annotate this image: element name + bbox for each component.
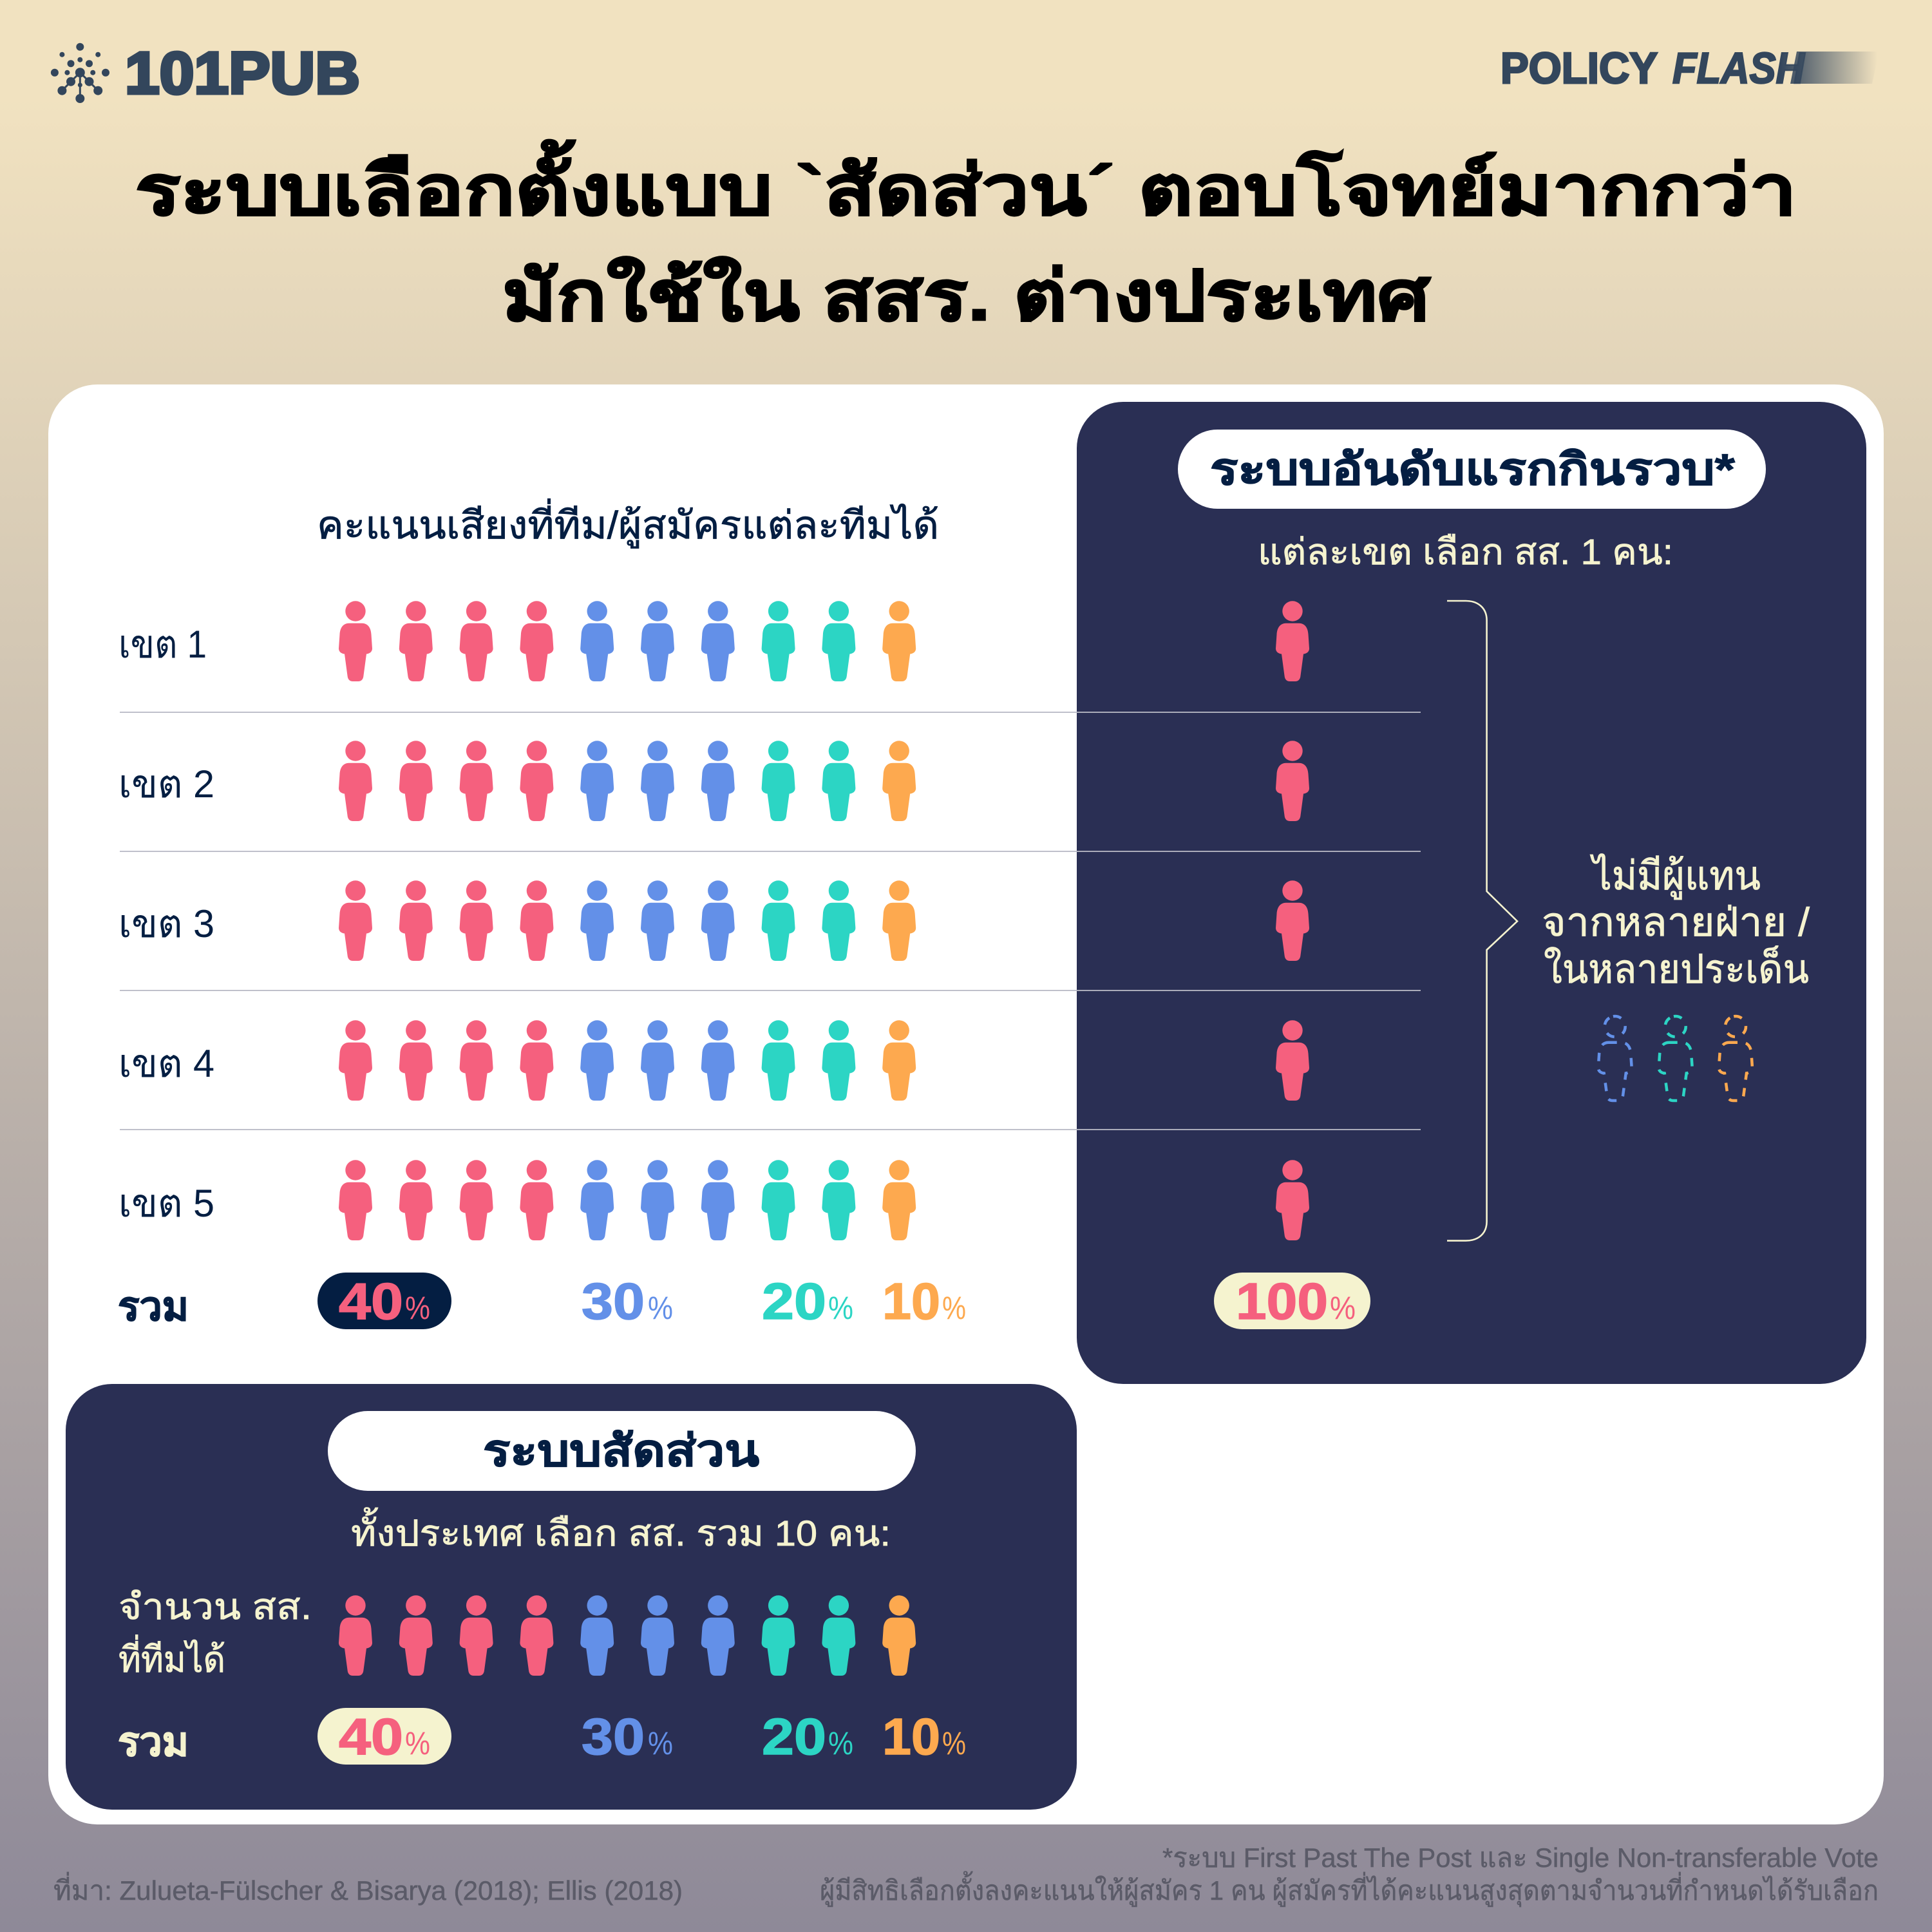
footnote: ผู้มีสิทธิเลือกตั้งลงคะแนนให้ผู้สมัคร 1 คน ผู้สมัครที่ได้คะแนนสูงสุดตามจำนวนที่กำหนดได้รับเลือก bbox=[820, 1871, 1879, 1908]
label: POLICY FLASH bbox=[1501, 44, 1879, 93]
wordmark: 101PUB bbox=[125, 41, 360, 106]
footnote bbox=[820, 1842, 1879, 1908]
row: district 2 bbox=[118, 741, 916, 821]
pill heading: proportional system bbox=[328, 1411, 916, 1491]
value: 20%: % bbox=[828, 1290, 853, 1326]
dashed unrepresented icons bbox=[1598, 1014, 1752, 1101]
value: 20% bbox=[762, 1708, 853, 1765]
value: 30%: 30 bbox=[582, 1273, 645, 1330]
label: total: รวม bbox=[118, 1285, 189, 1329]
value: 10% bbox=[882, 1273, 966, 1330]
label: POLICY FLASH: POLICY bbox=[1501, 44, 1658, 93]
callout: no representation: ไม่มีผู้แทน bbox=[1589, 853, 1761, 900]
bracket bbox=[1447, 601, 1517, 1241]
value: 10% bbox=[882, 1708, 966, 1765]
value: 10%: 10 bbox=[882, 1273, 940, 1330]
value: 30%: 30 bbox=[582, 1708, 645, 1765]
row: district 3 bbox=[118, 880, 916, 961]
value: 20% bbox=[762, 1273, 853, 1330]
label: MPs per team: ที่ทีมได้ bbox=[118, 1634, 225, 1680]
title: ระบบเลือกตั้งแบบ `สัดส่วน´ ตอบโจทย์มากกว่า bbox=[135, 139, 1797, 229]
subheading: ten MPs nationwide: ทั้งประเทศ เลือก สส. รวม 10 คน: bbox=[351, 1508, 891, 1553]
label: POLICY FLASH: FLASH bbox=[1672, 44, 1806, 93]
panel: proportional system bbox=[66, 1384, 1077, 1810]
total: 100% bbox=[1214, 1273, 1370, 1330]
row: district 3: เขต 3 bbox=[118, 902, 214, 945]
footnote: *ระบบ First Past The Post และ Single Non-transferable Vote bbox=[1162, 1842, 1879, 1873]
value: 10%: % bbox=[942, 1290, 966, 1326]
value: 30% bbox=[582, 1273, 673, 1330]
pill: 40%: % bbox=[405, 1725, 430, 1761]
title: มักใช้ใน สสร. ต่างประเทศ bbox=[502, 257, 1431, 335]
pill heading: proportional system: ระบบสัดส่วน bbox=[483, 1426, 759, 1475]
pill: 40%: 40 bbox=[339, 1273, 403, 1330]
value: 10%: 10 bbox=[882, 1708, 940, 1765]
value: 30% bbox=[582, 1708, 673, 1765]
pill heading: first past the post bbox=[1178, 430, 1766, 509]
row: district 5 bbox=[118, 1160, 916, 1240]
value: 20%: 20 bbox=[762, 1273, 826, 1330]
row: district 1: เขต 1 bbox=[118, 623, 207, 666]
total: 100%: 100 bbox=[1236, 1273, 1328, 1330]
row: district 2: เขต 2 bbox=[118, 762, 214, 806]
value: 30%: % bbox=[648, 1725, 673, 1761]
callout: no representation: จากหลายฝ่าย / bbox=[1542, 900, 1810, 945]
column heading: votes: คะแนนเสียงที่ทีม/ผู้สมัครแต่ละทีมได้ bbox=[317, 498, 939, 549]
label: MPs per team bbox=[118, 1586, 312, 1680]
winner icons per district bbox=[1276, 601, 1309, 1240]
pill: 40%: % bbox=[405, 1290, 430, 1326]
value: 10%: % bbox=[942, 1725, 966, 1761]
subheading: one MP per district: แต่ละเขต เลือก สส. 1 คน: bbox=[1258, 531, 1673, 572]
divider lines bbox=[120, 712, 1421, 1130]
pill: 40% bbox=[317, 1708, 451, 1765]
row: district 1 bbox=[118, 601, 916, 681]
white main panel bbox=[48, 384, 1884, 1824]
row: district 5: เขต 5 bbox=[118, 1182, 214, 1225]
callout: no representation: ในหลายประเด็น bbox=[1544, 945, 1809, 992]
value: 20%: % bbox=[828, 1725, 853, 1761]
icon: logo network bbox=[51, 43, 109, 103]
label: MPs per team: จำนวน สส. bbox=[118, 1586, 312, 1627]
pill: 40%: 40 bbox=[339, 1708, 403, 1765]
panel: first past the post bbox=[1077, 402, 1866, 1384]
total: 100%: % bbox=[1330, 1290, 1356, 1326]
logo: 101PUB bbox=[51, 41, 360, 106]
totals row: district vote share bbox=[118, 1273, 966, 1330]
value: 30%: % bbox=[648, 1290, 673, 1326]
callout: no representation bbox=[1542, 853, 1810, 992]
title bbox=[135, 139, 1797, 335]
pill heading: first past the post: ระบบอันดับแรกกินรวบ* bbox=[1210, 445, 1736, 494]
label: total: รวม bbox=[118, 1720, 189, 1765]
value: 20%: 20 bbox=[762, 1708, 826, 1765]
pill: 40% bbox=[317, 1273, 451, 1330]
row: district 4 bbox=[118, 1020, 916, 1101]
seat icons bbox=[339, 1595, 916, 1676]
source: ที่มา: Zulueta-Fülscher & Bisarya (2018); Ellis (2018) bbox=[53, 1872, 683, 1906]
row: district 4: เขต 4 bbox=[118, 1042, 214, 1085]
